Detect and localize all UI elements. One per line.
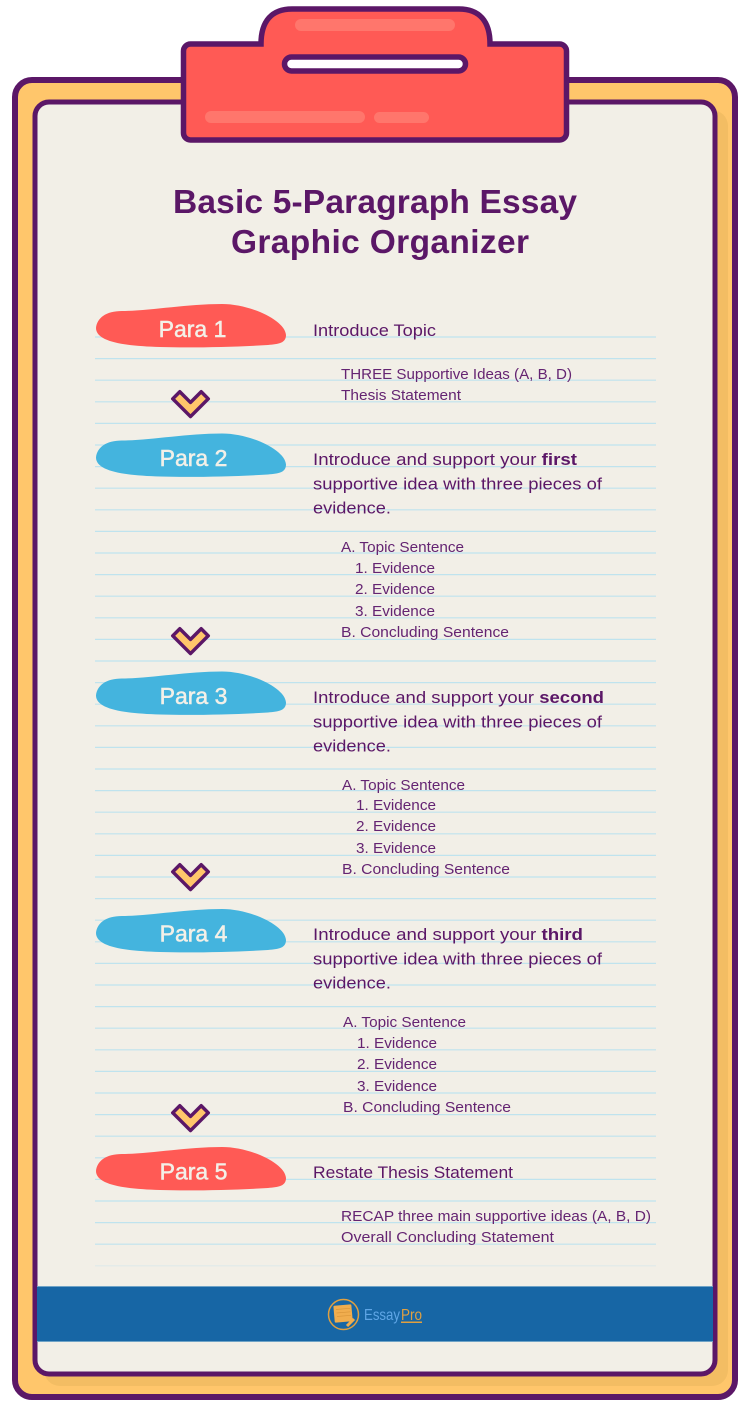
para 5 badge: Para 5 bbox=[160, 1158, 227, 1184]
para 4 text: evidence. bbox=[313, 974, 391, 992]
para 3 text bbox=[313, 688, 604, 878]
para 3 text: A. Topic Sentence bbox=[342, 777, 465, 794]
arrow: para 3 to 4 bbox=[173, 865, 208, 890]
title: Basic 5-Paragraph Essay bbox=[173, 184, 577, 221]
para 2 text: supportive idea with three pieces of bbox=[313, 474, 602, 494]
para 5 text bbox=[313, 1163, 651, 1246]
para 5 text: RECAP three main supportive ideas (A, B, D) bbox=[341, 1208, 651, 1225]
title bbox=[173, 184, 577, 261]
para 5 text: Restate Thesis Statement bbox=[313, 1163, 513, 1182]
para 2 text: A. Topic Sentence bbox=[341, 539, 464, 556]
para 2 text: 2. Evidence bbox=[355, 581, 435, 598]
para 4 text: 3. Evidence bbox=[357, 1078, 437, 1095]
para 4 badge bbox=[96, 909, 286, 952]
logo wordmark: Pro bbox=[401, 1307, 422, 1324]
para 3 badge: Para 3 bbox=[160, 683, 227, 709]
para 1 text bbox=[313, 321, 572, 404]
arrow: para 1 to 2 bbox=[173, 392, 208, 417]
para 5 badge bbox=[96, 1147, 286, 1190]
para 3 text: evidence. bbox=[313, 736, 391, 756]
arrow: para 2 to 3 bbox=[173, 629, 208, 654]
para 1 badge: Para 1 bbox=[159, 316, 226, 342]
para 4 text: B. Concluding Sentence bbox=[343, 1099, 511, 1116]
para 3 text: supportive idea with three pieces of bbox=[313, 712, 602, 732]
para 3 text: 1. Evidence bbox=[356, 797, 436, 814]
footer band bbox=[37, 1286, 713, 1342]
para 2 text: 3. Evidence bbox=[355, 603, 435, 620]
para 3 text: 3. Evidence bbox=[356, 840, 436, 857]
para 3 badge bbox=[96, 672, 286, 715]
para 3 text: Introduce and support your second bbox=[313, 688, 604, 707]
logo wordmark: Essay bbox=[364, 1307, 400, 1324]
para 3 text: 2. Evidence bbox=[356, 818, 436, 835]
clip highlight bars bbox=[205, 19, 455, 123]
para 1 text: Introduce Topic bbox=[313, 321, 437, 340]
para 2 text bbox=[313, 450, 602, 641]
para 4 text: 2. Evidence bbox=[357, 1056, 437, 1073]
para 1 text: Thesis Statement bbox=[341, 387, 462, 404]
para 3 text: B. Concluding Sentence bbox=[342, 861, 510, 878]
para 1 badge bbox=[96, 304, 286, 347]
para 4 badge: Para 4 bbox=[160, 920, 228, 946]
para 2 text: 1. Evidence bbox=[355, 560, 435, 577]
para 4 text bbox=[313, 925, 602, 1116]
para 4 text: 1. Evidence bbox=[357, 1035, 437, 1052]
clip bbox=[184, 9, 566, 140]
arrow: para 4 to 5 bbox=[173, 1106, 208, 1131]
para 1 text: THREE Supportive Ideas (A, B, D) bbox=[341, 366, 572, 383]
clip slot bbox=[284, 57, 466, 71]
para 2 text: evidence. bbox=[313, 498, 391, 518]
para 2 badge bbox=[96, 434, 286, 477]
para 2 text: B. Concluding Sentence bbox=[341, 624, 509, 641]
para 4 text: supportive idea with three pieces of bbox=[313, 950, 602, 968]
para 5 text: Overall Concluding Statement bbox=[341, 1229, 555, 1246]
title: Graphic Organizer bbox=[231, 224, 529, 261]
para 4 text: A. Topic Sentence bbox=[343, 1014, 466, 1031]
logo icon: notepad and pencil bbox=[328, 1300, 358, 1330]
para 2 text: Introduce and support your first bbox=[313, 450, 577, 469]
para 4 text: Introduce and support your third bbox=[313, 925, 583, 944]
para 2 badge: Para 2 bbox=[160, 445, 227, 471]
